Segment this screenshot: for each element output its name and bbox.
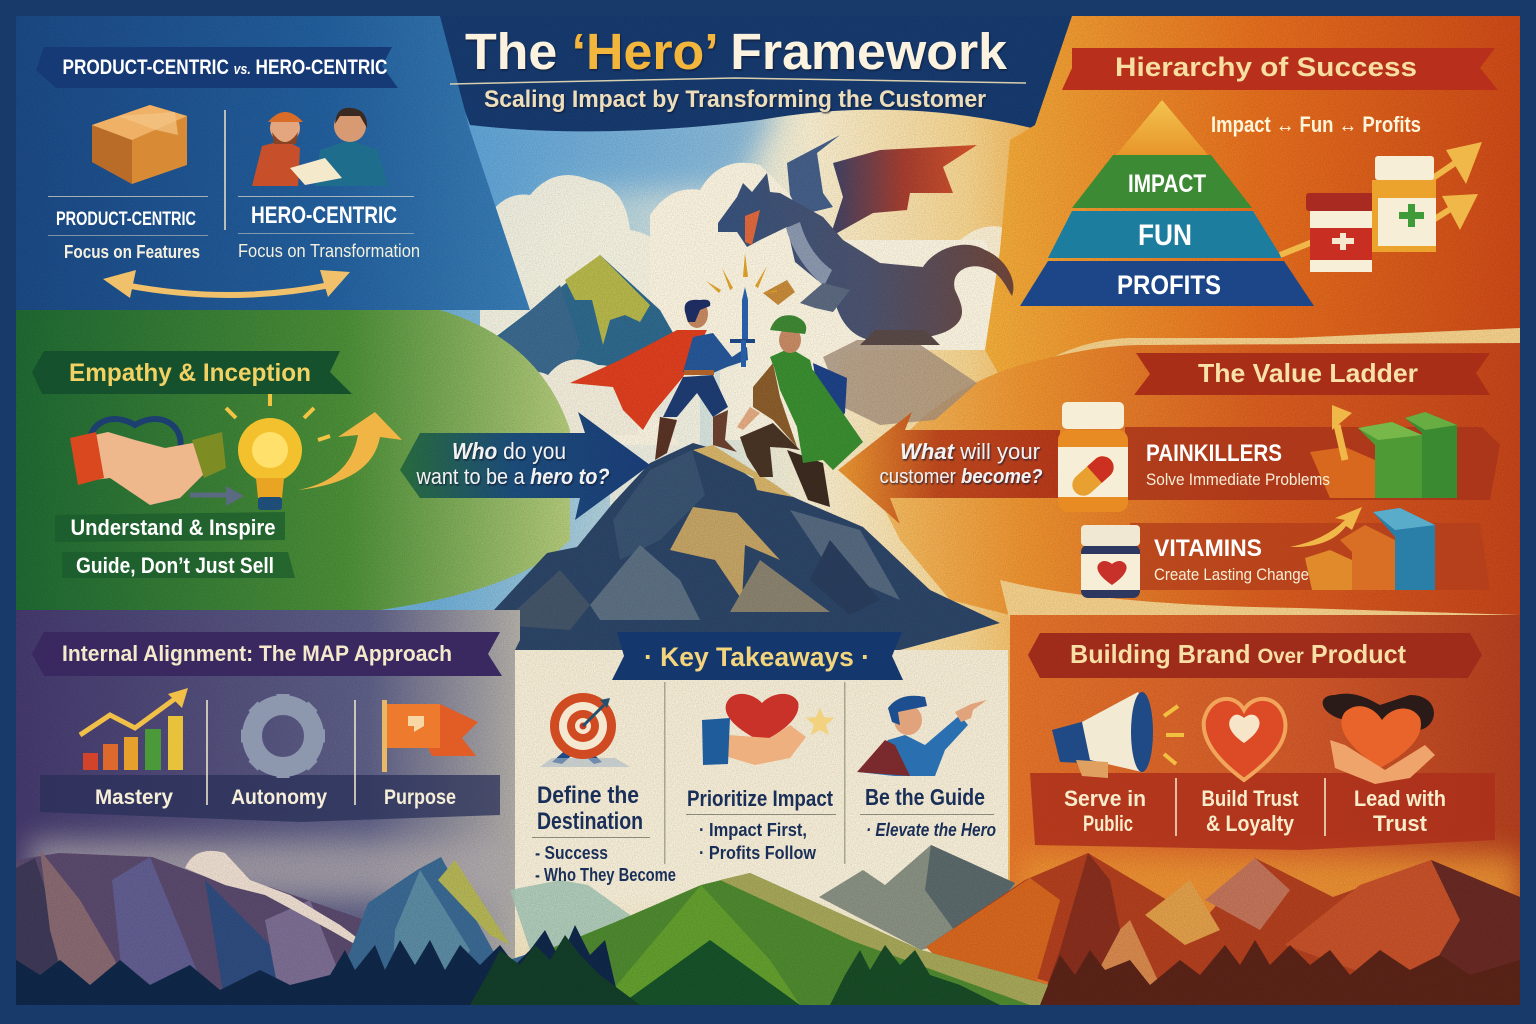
arrow: who do you want to be a hero to: Who do you — [452, 438, 566, 464]
icon: purpose flag — [382, 700, 478, 772]
icon: autonomy gear — [241, 694, 325, 778]
text: product-centric — [48, 196, 208, 262]
icon: megaphone — [1052, 692, 1184, 778]
chart: success pyramid: FUN — [1138, 219, 1192, 252]
heading: building brand over product — [1028, 633, 1482, 678]
chart: success pyramid: IMPACT — [1128, 170, 1206, 198]
text: painkillers: PAINKILLERS — [1146, 440, 1282, 467]
icon: handshake — [70, 419, 244, 506]
panel: dragon mountain — [823, 340, 977, 425]
heading: key takeaways — [612, 632, 903, 680]
dividers in brand — [1175, 778, 1326, 836]
text: brand labels: Public — [1083, 811, 1133, 836]
heading: key takeaways: · Key Takeaways · — [644, 642, 870, 672]
text: understand and guide — [55, 512, 295, 578]
text: vitamins: Create Lasting Change — [1154, 565, 1309, 584]
heading: building brand over product: Building Brand Over Product — [1070, 639, 1406, 669]
text: define the destination: - Who They Become — [535, 865, 676, 885]
heading: the value ladder — [1134, 353, 1490, 395]
icon: vitamins jar — [1081, 525, 1140, 598]
forest silhouettes — [16, 925, 1520, 1005]
text: vitamins: VITAMINS — [1154, 535, 1262, 562]
arrow: growth arrow — [298, 412, 402, 490]
text: vitamins — [1154, 535, 1309, 584]
icon: target — [540, 693, 630, 767]
panel: hierarchy of success background — [985, 16, 1520, 398]
panel: distant mountain — [485, 255, 680, 435]
text: product-centric: Focus on Features — [64, 242, 200, 262]
text: be the guide: Be the Guide — [865, 784, 985, 810]
panel: value ladder background — [870, 343, 1520, 622]
arrow: what will your customer become: What will your — [900, 439, 1040, 464]
text: painkillers — [1146, 440, 1330, 489]
illustration: dragon — [718, 135, 1013, 345]
icon: heart in hand — [702, 694, 834, 765]
text: brand labels: Build Trust — [1202, 786, 1299, 811]
text: be the guide: · Elevate the Hero — [866, 820, 996, 840]
chart: success pyramid: PROFITS — [1117, 270, 1221, 300]
heading: hierarchy of success: Hierarchy of Success — [1115, 52, 1417, 82]
text: hero-centric: Focus on Transformation — [238, 241, 420, 261]
text: understand and guide: Understand & Inspire — [70, 515, 276, 540]
band: painkillers — [1125, 427, 1500, 500]
icon: heart in hands — [1323, 694, 1435, 784]
heading: product-centric vs hero-centric — [36, 47, 398, 88]
heading: hierarchy of success — [1062, 48, 1498, 90]
text: define the destination: Destination — [537, 808, 643, 835]
text: map labels: Mastery — [95, 786, 173, 809]
panel: key takeaways content — [532, 632, 996, 885]
panel: bottom mountain range — [16, 845, 1520, 1005]
illustration: hero with red cape — [570, 287, 755, 460]
text: prioritize impact: Prioritize Impact — [687, 786, 834, 811]
chart: success pyramid — [1020, 100, 1314, 306]
heading: the value ladder: The Value Ladder — [1198, 358, 1418, 388]
text: understand and guide: Guide, Don’t Just Sell — [76, 553, 274, 578]
arrow: what will your customer become — [838, 412, 1060, 524]
icon: sword sparks — [706, 253, 777, 293]
arrow: double arrow — [103, 270, 350, 298]
heading: internal alignment: Internal Alignment: The MAP Approach — [62, 641, 452, 666]
icon: mastery chart — [80, 688, 188, 770]
icon: growing blocks green — [1310, 405, 1457, 498]
band: vitamins — [1130, 523, 1490, 590]
title: Scaling Impact by Transforming the Customer — [484, 86, 986, 113]
icon: rising pill bottles — [1280, 142, 1482, 272]
text: map labels — [95, 786, 456, 809]
text: brand labels: Lead with — [1354, 786, 1446, 811]
panel: summit rock — [480, 443, 1000, 650]
arrow: who do you want to be a hero to: want to be a hero to? — [416, 464, 610, 489]
text: brand labels: Trust — [1373, 811, 1428, 836]
text: brand labels — [1064, 786, 1446, 836]
heading: empathy and inception: Empathy & Inception — [69, 359, 311, 387]
icon: light bulb — [226, 394, 330, 510]
text: define the destination — [532, 782, 676, 885]
text: prioritize impact: · Impact First, — [699, 820, 807, 840]
text: prioritize impact — [686, 786, 836, 863]
heading: empathy and inception — [32, 351, 352, 394]
text: map labels: Autonomy — [231, 786, 327, 809]
title — [450, 23, 1026, 113]
panel: building brand background — [1010, 615, 1520, 1005]
divider — [224, 110, 226, 230]
band behind map items — [40, 775, 500, 822]
panel: empathy and inception background — [16, 310, 570, 610]
illustration: guide with green cape — [737, 315, 863, 507]
panel: title banner background — [430, 16, 1090, 131]
text: map labels: Purpose — [384, 786, 456, 809]
heading: internal alignment — [32, 632, 502, 676]
text: brand labels: & Loyalty — [1206, 811, 1295, 836]
icon: painkiller bottle — [1058, 402, 1128, 512]
arrow: who do you want to be a hero to — [400, 412, 650, 520]
icon: guide pointing — [857, 696, 987, 776]
text: hero-centric: HERO-CENTRIC — [251, 202, 397, 229]
text: be the guide — [860, 784, 996, 840]
title: The ‘Hero’ Framework — [465, 23, 1008, 80]
text: product-centric: PRODUCT-CENTRIC — [56, 209, 196, 230]
icon: growing blocks blue — [1290, 507, 1435, 590]
panel: internal alignment background — [16, 610, 520, 1005]
text: define the destination: - Success — [535, 843, 608, 863]
text: brand labels: Serve in — [1064, 786, 1146, 811]
dividers in map — [206, 700, 356, 805]
panel: product vs hero background — [16, 16, 530, 310]
arrow: what will your customer become: customer become? — [880, 466, 1042, 488]
text: painkillers: Solve Immediate Problems — [1146, 470, 1330, 489]
panel: key takeaways card background — [515, 650, 1008, 975]
heading: product-centric vs hero-centric: PRODUCT-CENTRIC vs. HERO-CENTRIC — [62, 56, 388, 79]
text: hero-centric — [238, 196, 420, 261]
text: define the destination: Define the — [537, 782, 639, 809]
icon: trust heart — [1204, 699, 1286, 780]
band behind brand items — [1030, 773, 1495, 850]
text: impact fun profits: Impact ↔ Fun ↔ Profits — [1211, 112, 1421, 137]
icon: product box — [92, 105, 187, 184]
icon: hero-centric people — [252, 108, 388, 186]
text: prioritize impact: · Profits Follow — [699, 843, 817, 863]
